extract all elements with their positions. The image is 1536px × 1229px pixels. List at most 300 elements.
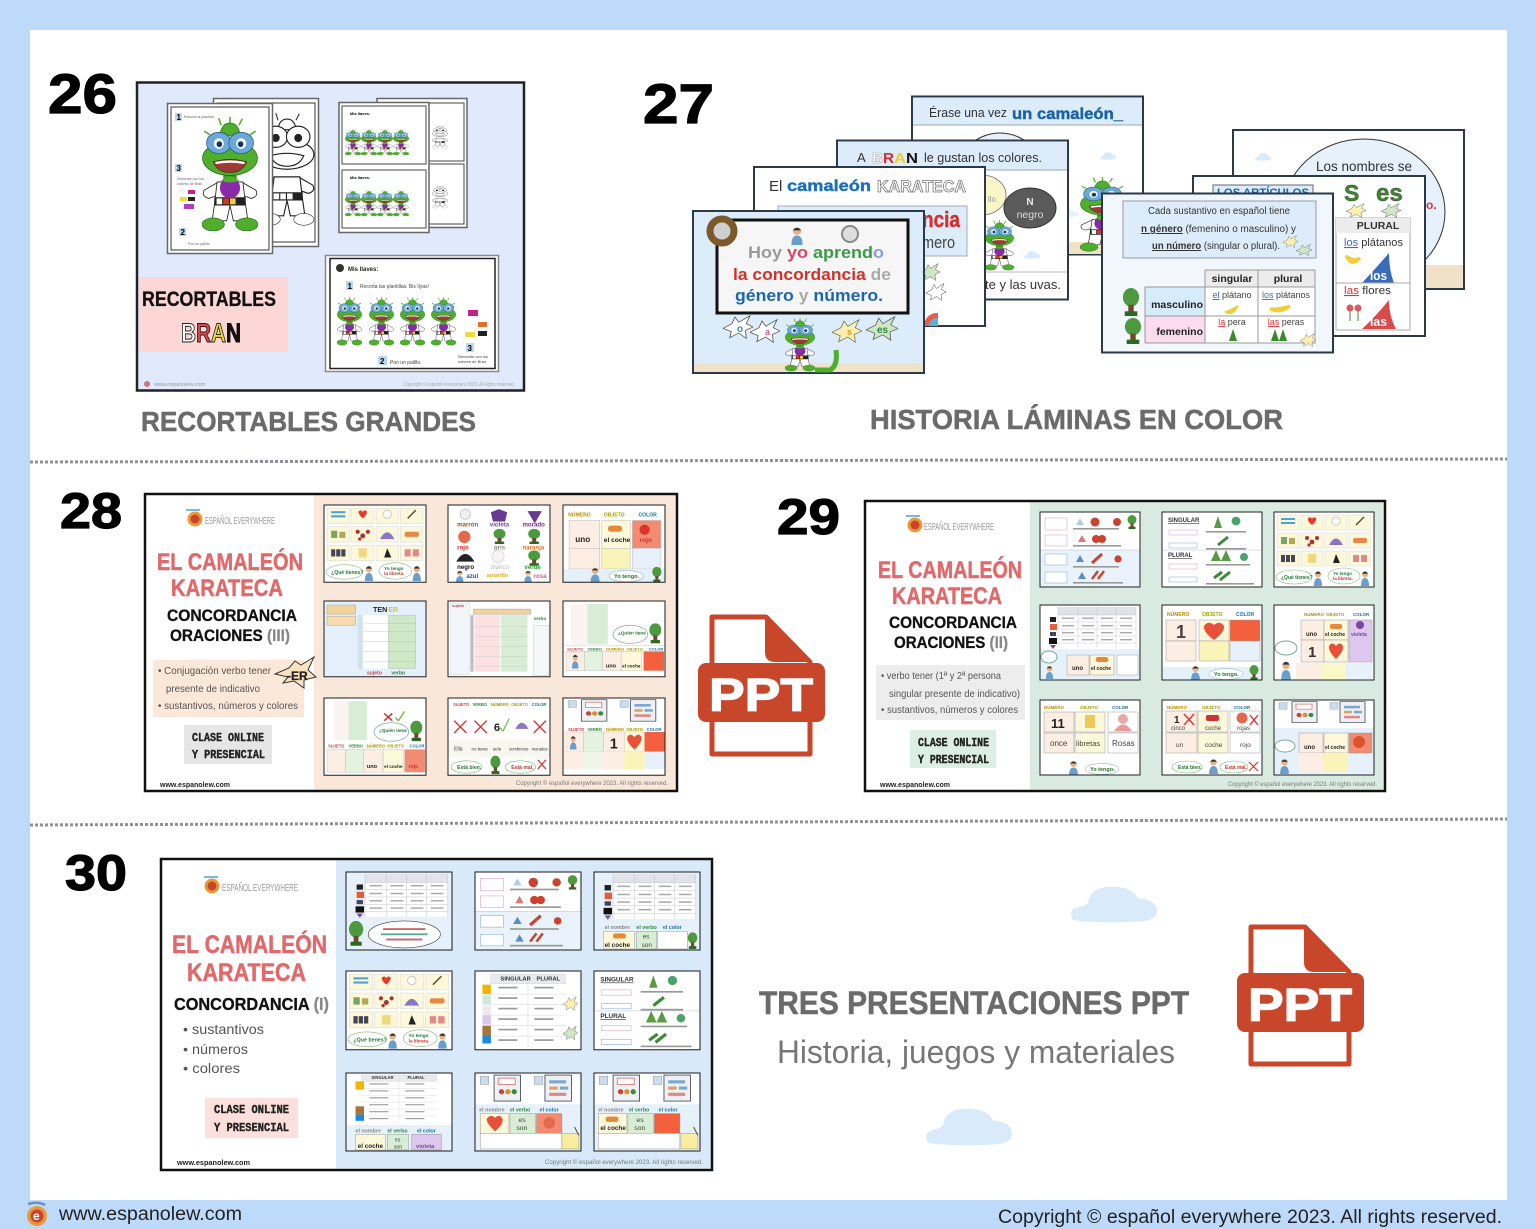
coloring sheet, front: 1	[176, 113, 182, 122]
slide: cada sustantivo	[1102, 194, 1333, 352]
class tag: CLASE ONLINE	[192, 731, 264, 745]
thumbnail: 1 corazón rojo: Yo tengo.	[1214, 672, 1239, 678]
thumbnail: pasos corazón: es	[518, 1117, 526, 1124]
bullet list	[153, 660, 304, 717]
slide: los artículos: los plátanos	[1344, 237, 1403, 249]
icon: ppt file 1	[698, 616, 825, 754]
thumbnail: color words: naranja	[522, 544, 545, 551]
slide: el camaleón karateca: mero	[922, 233, 955, 252]
thumbnail: tabla violeta: son	[394, 1144, 402, 1150]
slide: hoy yo aprendo: a	[765, 327, 771, 337]
thumbnail: uno el coche rojo: rojo	[639, 537, 652, 544]
thumbnail: uno el coche violeta: OBJETO	[1326, 612, 1345, 617]
thumbnail: pasos corazón: el color	[540, 1108, 559, 1113]
thumbnail: 11 once libretas rosas: 11	[1051, 716, 1065, 731]
thumbnail: cinco coche rojas con errores: rojo	[1240, 742, 1251, 749]
thumbnail: tener table blue: verbo	[391, 671, 405, 677]
thumbnail: tabla y uno el coche: uno	[1072, 666, 1083, 672]
thumbnail: uno el coche rojo: el coche	[604, 537, 631, 544]
thumbnail: color words: marrón	[457, 522, 478, 529]
thumbnail: vocabulary grid: ¿Qué tienes?	[1281, 575, 1313, 581]
thumbnail: uno el coche rojo: NÚMERO	[568, 511, 591, 518]
thumbnail: quién tiene uno el coche: OBJETO	[626, 647, 643, 651]
thumbnail: tabla el coche	[594, 872, 700, 950]
class tag: CLASE ONLINE	[918, 736, 989, 750]
thumbnail: 11 once libretas rosas: libretas	[1076, 739, 1100, 748]
section 26: recortables grandes	[48, 62, 524, 437]
thumbnail: quién tiene uno el coche: SUJETO	[567, 647, 583, 651]
subtitle: CONCORDANCIA	[889, 613, 1017, 632]
thumbnail: tener table blue: ER	[388, 606, 398, 614]
thumbnail: tabla violeta	[346, 1073, 452, 1151]
cloud top	[1071, 887, 1157, 922]
bullet list: • números	[183, 1041, 248, 1057]
thumbnail: quién tiene con error: VERBO	[348, 743, 364, 748]
thumbnail: pasos coche: el color	[659, 1108, 678, 1113]
slide: a bran le gustan los colores: A	[894, 150, 906, 167]
slide: a bran le gustan los colores: A	[857, 150, 866, 165]
coloring sheet, back	[214, 98, 318, 246]
thumbnail: 11 once libretas rosas: Yo tengo.	[1090, 767, 1115, 773]
bullet list: • verbo tener (1ª y 2ª persona	[881, 670, 1001, 682]
slide: érase una vez: un camaleón_	[1012, 106, 1123, 123]
thumbnail: pasos corazón: COLOR	[647, 727, 661, 732]
thumbnail: uno el coche rojo: COLOR	[638, 512, 657, 518]
thumbnail: pasos corazón: son	[516, 1125, 528, 1132]
website: www.espanolew.com	[879, 782, 950, 789]
slide: cada sustantivo: Cada sustantivo en español tiene	[1148, 206, 1290, 217]
thumbnail: quién tiene uno el coche: VERBO	[587, 647, 602, 651]
thumbnail: presente de indicativo: sujeto	[452, 603, 465, 608]
slide: a bran le gustan los colores: te y las uvas.	[985, 277, 1061, 292]
thumbnail: uno el coche rojo: uno	[575, 535, 590, 544]
thumbnail: color words: amarillo	[487, 573, 509, 579]
thumbnail: quién tiene uno el coche	[563, 601, 665, 677]
thumbnail: uno el coche violeta: NÚMERO	[1304, 611, 1324, 617]
thumbnail: vocabulary grid: Yo tengo	[409, 1033, 429, 1039]
number 26: 26	[48, 62, 117, 125]
thumbnail: oraciones	[475, 872, 581, 950]
thumbnail: tabla el coche: son	[642, 942, 652, 949]
thumbnail: tabla singular plural: PLURAL	[536, 976, 561, 982]
number 28: 28	[60, 483, 122, 539]
section 27: historia láminas en color	[643, 72, 1464, 435]
thumbnail: quién tiene uno el coche: COLOR	[649, 647, 663, 651]
thumbnail: sujeto verbo errores: VERBO	[472, 702, 488, 707]
bullet list: • sustantivos, números y colores	[158, 700, 298, 712]
copyright: Copyright © español everywhere 2023. All rights reserved.	[516, 780, 668, 787]
thumbnail: color words: morado	[522, 522, 545, 529]
thumbnail: uno el coche violeta	[1274, 605, 1374, 680]
thumbnail: cinco coche rojas con errores	[1162, 700, 1262, 775]
thumbnail: 1 corazón rojo: 1	[1176, 622, 1186, 642]
thumbnail: cinco coche rojas con errores: 1	[1174, 715, 1180, 726]
thumbnail: uno el coche rojo: OBJETO	[604, 512, 625, 518]
thumbnail: tabla violeta: el verbo	[387, 1128, 408, 1134]
thumbnail: vocabulary grid	[346, 971, 452, 1050]
thumbnail: quién tiene con error: SUJETO	[328, 743, 345, 748]
thumbnail: vocabulary grid: ¿Qué tienes?	[331, 570, 363, 576]
thumbnail: cinco coche rojas con errores: cinco	[1171, 726, 1186, 732]
bullet list	[183, 1021, 264, 1076]
panel: concordancia oraciones ii	[865, 501, 1385, 791]
slide: cada sustantivo: la pera	[1218, 317, 1246, 327]
subheading: historia juegos y materiales: Historia, juegos y materiales	[777, 1034, 1175, 1070]
thumbnail: color words: rosa	[534, 573, 547, 580]
thumbnail: color words: blanco	[491, 564, 509, 571]
panel: concordancia i	[161, 859, 712, 1170]
coloring sheet, front: 3	[176, 164, 182, 173]
thumbnail: pasos corazón: el verbo	[510, 1108, 530, 1113]
thumbnail: quién tiene con error: OBJETO	[387, 743, 405, 748]
thumbnail: color words: negro	[457, 564, 474, 571]
thumbnail: sujeto verbo errores: Está bien.	[457, 765, 482, 771]
slide: los artículos: los	[1370, 268, 1387, 283]
thumbnail: singular plural: SINGULAR	[600, 977, 634, 983]
thumbnail: sujeto verbo errores: morados	[532, 747, 547, 752]
class tag: Y PRESENCIAL	[918, 753, 989, 767]
thumbnail: sujeto verbo errores: 6	[494, 722, 500, 734]
section 30	[65, 845, 712, 1170]
heading line 2: KARATECA	[171, 575, 283, 602]
thumbnail: 11 once libretas rosas: OBJETO	[1080, 705, 1099, 710]
thumbnail: cinco coche rojas con errores: OBJETO	[1202, 705, 1221, 710]
thumbnail: sujeto verbo errores: no tiene	[471, 747, 488, 752]
coloring sheet, front: Decorate con los	[177, 177, 204, 181]
slide: a bran le gustan los colores: negro	[1017, 209, 1044, 221]
thumbnail: pasos coche: el verbo	[629, 1108, 649, 1113]
footer copyright: Copyright © español everywhere 2023. All rights reserved.	[998, 1207, 1502, 1228]
slide: hoy yo aprendo: s	[847, 327, 852, 337]
thumbnail: quién tiene uno el coche: uno	[606, 664, 617, 670]
caption: recortables grandes: RECORTABLES GRANDES	[141, 406, 476, 437]
slide: a bran le gustan los colores: llo	[988, 195, 997, 204]
subtitle: CONCORDANCIA (I)	[174, 994, 329, 1014]
slide: los artículos: es	[1376, 180, 1403, 207]
thumbnail: color words: verde	[524, 564, 541, 571]
slide: cada sustantivo: masculino	[1151, 299, 1203, 311]
label: recortables bran: RECORTABLES	[142, 288, 276, 311]
four-chameleon sheets, front: Mis llaves:	[350, 111, 370, 116]
slide: cada sustantivo: un número (singular o plural).	[1152, 241, 1280, 252]
subtitle: CONCORDANCIA	[167, 606, 297, 625]
thumbnail: sujeto verbo errores: seis	[493, 747, 502, 752]
slide: érase una vez	[912, 96, 1143, 254]
slide: el camaleón karateca: ncia	[922, 207, 961, 232]
thumbnail: pasos corazón: VERBO	[587, 727, 603, 732]
heading line 2: KARATECA	[187, 959, 306, 987]
bullet list: • sustantivos	[183, 1021, 264, 1037]
thumbnail: quién tiene con error: rojo	[409, 764, 418, 770]
large four-chameleon sheet: Recorta las plantillas. Bis Ilyas!	[360, 284, 429, 290]
thumbnail: sujeto verbo errores: Está mal.	[511, 765, 534, 771]
large four-chameleon sheet: 2	[380, 357, 385, 366]
thumbnail: color words: violeta	[490, 522, 510, 529]
thumbnail: cinco coche rojas con errores: rojas	[1237, 726, 1250, 732]
thumbnail: quién tiene uno el coche: el coche	[622, 664, 641, 669]
section 29	[777, 489, 1385, 791]
thumbnail: tabla violeta: violeta	[416, 1144, 435, 1150]
thumbnail: vocabulary grid	[324, 505, 426, 582]
logo: ESPAÑOL EVERYWHERE	[222, 881, 298, 894]
thumbnail: pasos corazón: 1	[610, 736, 618, 752]
bullet list: • colores	[183, 1060, 240, 1076]
large four-chameleon sheet: 1	[348, 282, 352, 291]
slide: hoy yo aprendo: la concordancia de	[733, 265, 891, 284]
thumbnail: 1 corazón rojo: COLOR	[1236, 612, 1254, 618]
dotted divider 2	[30, 819, 1507, 825]
label: recortables bran	[139, 277, 288, 352]
thumbnail: presente de indicativo: verbo	[534, 616, 546, 621]
thumbnail: vocabulary grid	[1274, 512, 1374, 587]
slide: los artículos: las flores	[1344, 285, 1392, 297]
number 30: 30	[65, 845, 127, 901]
panel: concordancia oraciones iii	[145, 494, 677, 791]
cloud bottom	[926, 1109, 1012, 1145]
four-chameleon sheets, front	[339, 102, 429, 232]
thumbnail: pasos coche: el coche	[600, 1125, 626, 1132]
coloring sheet, front	[168, 104, 272, 254]
thumbnail: pasos coche: son	[634, 1125, 646, 1132]
thumbnail: tabla violeta: el color	[417, 1128, 436, 1134]
bullet list: • Conjugación verbo tener	[158, 665, 271, 677]
subtitle line 2: ORACIONES (II)	[894, 633, 1008, 652]
thumbnail: color words	[448, 505, 550, 582]
heading: EL CAMALEÓN	[878, 556, 1022, 584]
thumbnail: pasos corazón: OBJETO	[626, 727, 644, 732]
thumbnail: color words: gris	[494, 544, 506, 551]
copyright: Copyright © español everywhere 2023. All rights reserved.	[545, 1159, 703, 1166]
heading: EL CAMALEÓN	[157, 548, 303, 576]
number 29: 29	[777, 489, 840, 545]
four-chameleon sheets, back	[377, 98, 467, 228]
thumbnail: tener table blue: TEN	[373, 606, 387, 614]
slide: los artículos: las	[1370, 314, 1387, 329]
slide: cada sustantivo: los plátanos	[1262, 290, 1311, 300]
logo	[906, 515, 994, 533]
thumbnail: pasos coche: es	[636, 1117, 644, 1124]
bullet list: singular presente de indicativo)	[889, 688, 1020, 700]
thumbnail: tener table blue: sujeto	[367, 671, 382, 677]
thumbnail: sujeto verbo errores	[448, 698, 550, 775]
bullet list	[876, 665, 1025, 720]
thumbnail: pasos uno el coche: el coche	[1325, 745, 1345, 751]
thumbnail: tabla y uno el coche: el coche	[1091, 666, 1111, 672]
thumbnail: pasos corazón: el nombre	[479, 1108, 505, 1113]
large four-chameleon sheet: colores de Bran.	[458, 359, 487, 364]
thumbnail: pasos uno el coche	[1274, 700, 1374, 775]
thumbnail: pasos coche: el nombre	[598, 1108, 624, 1113]
panel footer: Copyright © español everywhere 2020. All rights reserved.	[403, 381, 515, 388]
thumbnail: 1 corazón rojo: NÚMERO	[1167, 611, 1189, 618]
thumbnail: uno el coche rojo: Yo tengo.	[614, 574, 640, 580]
large four-chameleon sheet	[326, 256, 498, 372]
thumbnail: 11 once libretas rosas: Rosas	[1112, 739, 1135, 748]
thumbnail: pasos corazón	[563, 698, 665, 775]
thumbnail: cinco coche rojas con errores: NÚMERO	[1167, 704, 1187, 710]
class tag: Y PRESENCIAL	[192, 748, 265, 762]
thumbnail: tabla violeta: PLURAL	[407, 1075, 425, 1080]
thumbnail: 11 once libretas rosas: COLOR	[1112, 705, 1129, 710]
heading: tres presentaciones ppt: TRES PRESENTACIONES PPT	[759, 985, 1189, 1021]
label: recortables bran: R	[196, 318, 211, 348]
thumbnail: singular y plural: SINGULAR	[1168, 518, 1200, 524]
class tag: Y PRESENCIAL	[214, 1121, 289, 1135]
thumbnail: quién tiene con error: ¿Quién tiene	[379, 728, 407, 733]
thumbnail: 11 once libretas rosas: NÚMERO	[1044, 704, 1064, 710]
thumbnail: sujeto verbo errores: NÚMERO	[491, 702, 510, 707]
slide: hoy yo aprendo	[693, 211, 924, 373]
slide: a bran le gustan los colores: R	[883, 150, 894, 167]
thumbnail: quién tiene con error: uno	[367, 764, 378, 770]
thumbnail: pasos uno el coche: uno	[1304, 745, 1315, 751]
thumbnail: vocabulary grid: la libreta.	[409, 1038, 429, 1044]
large four-chameleon sheet: 3	[468, 344, 472, 353]
thumbnail: vocabulary grid: Yo tengo	[1333, 571, 1352, 576]
badge: -er	[275, 657, 316, 688]
slide: hoy yo aprendo: Hoy yo aprendo	[748, 243, 884, 262]
heading line 2: KARATECA	[892, 583, 1002, 610]
footer logo	[27, 1203, 47, 1226]
footer logo: e	[33, 1209, 40, 1223]
slide: cada sustantivo: n género (femenino o masculino) y	[1141, 224, 1296, 235]
bullet list: • sustantivos, números y colores	[881, 704, 1018, 716]
four-chameleon sheets, front: Mis llaves:	[350, 175, 370, 180]
website: www.espanolew.com	[159, 782, 230, 789]
slide: los artículos: S	[1344, 180, 1359, 206]
thumbnail: cinco coche rojas con errores: un	[1176, 742, 1184, 749]
footer website: www.espanolew.com	[58, 1204, 242, 1225]
thumbnail: quién tiene con error: COLOR	[410, 743, 424, 748]
thumbnail: quién tiene uno el coche: ¿Quién tiene	[618, 630, 646, 635]
thumbnail: uno el coche violeta: COLOR	[1353, 612, 1370, 617]
thumbnail: cinco coche rojas con errores: coche	[1205, 742, 1223, 749]
section 28	[60, 483, 677, 791]
coloring sheet, front: Recorta la plantilla.	[184, 115, 215, 119]
slide: a bran le gustan los colores: B	[872, 150, 883, 167]
slide: cada sustantivo: las peras	[1268, 317, 1305, 327]
class tag	[910, 730, 996, 768]
thumbnail: pasos coche	[594, 1073, 700, 1151]
icon: ppt file 2	[1237, 926, 1364, 1064]
thumbnail: cinco coche rojas con errores: Está mal.	[1225, 765, 1248, 771]
label: recortables bran: A	[211, 318, 226, 348]
thumbnail: pasos corazón	[475, 1073, 581, 1151]
heading: EL CAMALEÓN	[172, 929, 327, 959]
icon: ppt file 2: PPT	[1248, 979, 1352, 1031]
thumbnail: 1 corazón rojo: OBJETO	[1202, 612, 1223, 618]
thumbnail: tabla violeta: el nombre	[356, 1128, 381, 1134]
slide: el camaleón karateca: camaleón	[787, 178, 871, 195]
slide: el camaleón karateca	[754, 167, 985, 326]
slide: los artículos	[1193, 176, 1425, 336]
thumbnail: 1 corazón rojo	[1162, 605, 1262, 680]
website: www.espanolew.com	[176, 1160, 250, 1167]
thumbnail: pasos corazón: SUJETO	[568, 727, 585, 732]
thumbnail: sujeto verbo errores: SUJETO	[453, 702, 470, 707]
slide: cada sustantivo: femenino	[1156, 326, 1203, 338]
slide: érase una vez: Érase una vez	[929, 105, 1007, 120]
slide: los artículos: PLURAL	[1357, 220, 1400, 232]
thumbnail: uno el coche violeta: 1	[1308, 644, 1316, 661]
panel footer: www.espanolew.com	[153, 382, 205, 388]
coloring sheet, front: colores de Bran.	[177, 182, 203, 186]
thumbnail: singular y plural	[1162, 512, 1262, 587]
slide: hoy yo aprendo: género y número.	[735, 286, 883, 305]
thumbnail: sujeto verbo errores: OBJETO	[511, 702, 529, 707]
thumbnail: singular y plural: PLURAL	[1168, 553, 1193, 559]
thumbnail: color words: rojo	[457, 544, 469, 551]
thumbnail: uno el coche violeta: violeta	[1351, 632, 1367, 638]
thumbnail: oraciones singular plural	[1040, 512, 1140, 587]
class tag	[205, 1098, 298, 1138]
slide: a bran le gustan los colores: le gustan los colores.	[924, 150, 1042, 165]
thumbnail: tabla masculino femenino	[346, 872, 452, 950]
slide: cada sustantivo: singular	[1212, 273, 1252, 285]
icon: ppt file 1: PPT	[709, 669, 813, 721]
thumbnail: uno el coche violeta: el coche	[1325, 632, 1345, 638]
thumbnail: 11 once libretas rosas: once	[1050, 739, 1068, 748]
logo	[204, 876, 298, 894]
thumbnail: tener table blue	[324, 601, 426, 677]
label: recortables bran: B	[181, 318, 196, 348]
caption: historia láminas en color: HISTORIA LÁMINAS EN COLOR	[870, 404, 1283, 435]
thumbnail: singular plural	[594, 971, 700, 1050]
thumbnail: vocabulary grid: la libreta.	[384, 571, 404, 576]
slide: a bran le gustan los colores: N	[1026, 197, 1034, 208]
thumbnail: tabla singular plural	[475, 971, 581, 1050]
panel: recortables	[137, 82, 524, 390]
bullet list: presente de indicativo	[166, 683, 260, 695]
coloring sheet, front: 2	[180, 228, 186, 237]
thumbnail: vocabulary grid: ¿Qué tienes?	[353, 1037, 387, 1043]
dotted divider 1	[30, 459, 1507, 462]
thumbnail: quién tiene con error: NÚMERO	[367, 743, 386, 748]
thumbnail: cinco coche rojas con errores: COLOR	[1234, 705, 1251, 710]
thumbnail: presente de indicativo	[448, 601, 550, 677]
badge: -er: -ER	[287, 669, 308, 683]
slide: el camaleón karateca: El	[769, 178, 782, 195]
footer band	[0, 1200, 1536, 1229]
logo	[186, 509, 275, 527]
panel footer	[144, 381, 515, 388]
thumbnail: tabla el coche: el coche	[605, 942, 631, 949]
thumbnail: tabla el coche: el color	[663, 925, 682, 931]
thumbnail: vocabulary grid: Yo tengo	[384, 566, 404, 571]
thumbnail: tabla violeta: SINGULAR	[371, 1075, 394, 1080]
thumbnail: tabla el coche: es	[643, 934, 649, 941]
class tag: CLASE ONLINE	[214, 1103, 289, 1117]
thumbnail: quién tiene con error: el coche	[384, 764, 403, 769]
thumbnail: tabla violeta: es	[395, 1138, 401, 1144]
thumbnail: quién tiene con error	[324, 698, 426, 775]
thumbnail: tabla el coche: el nombre	[605, 925, 630, 931]
thumbnail: sujeto verbo errores: Ella	[454, 747, 463, 753]
thumbnail: uno el coche rojo	[563, 505, 665, 582]
large four-chameleon sheet: Mis llaves:	[348, 267, 378, 273]
coloring sheet, front: Pon un palillo.	[188, 242, 211, 246]
thumbnail: cinco coche rojas con errores: Está bien.	[1178, 765, 1202, 771]
slide: los nombres se	[1233, 130, 1464, 289]
subtitle line 2: ORACIONES (III)	[170, 626, 290, 645]
thumbnail: tabla el coche: el verbo	[636, 925, 657, 931]
thumbnail: singular plural: PLURAL	[600, 1013, 626, 1020]
slide: hoy yo aprendo: es	[877, 325, 889, 336]
thumbnail: 11 once libretas rosas	[1040, 700, 1140, 775]
copyright: Copyright © español everywhere 2023. All rights reserved.	[1228, 781, 1377, 788]
logo: ESPAÑOL EVERYWHERE	[205, 514, 275, 527]
thumbnail: tabla y uno el coche	[1040, 605, 1140, 680]
